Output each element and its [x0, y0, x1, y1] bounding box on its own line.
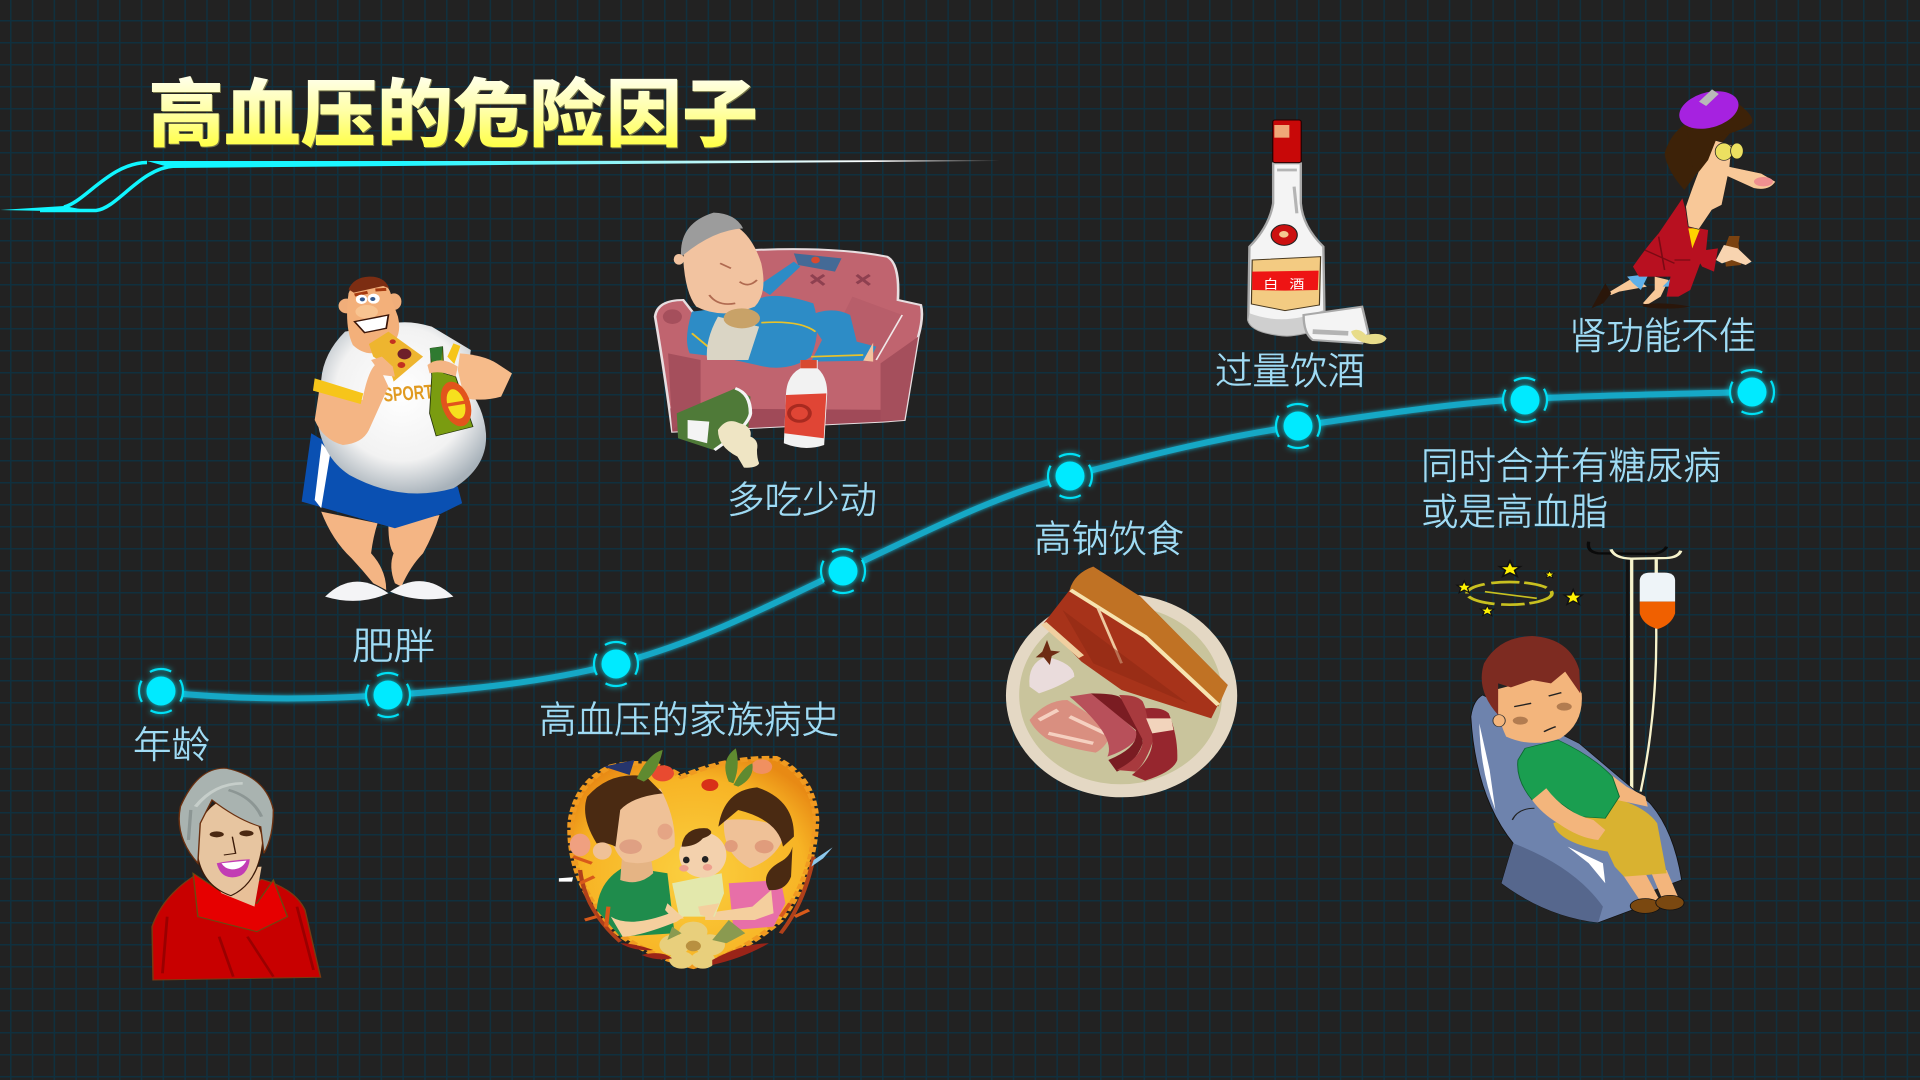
label: 年龄: 年龄	[133, 724, 210, 766]
icon: elderly woman	[152, 768, 321, 980]
icon: plate of cured meat	[1006, 567, 1237, 797]
shirt and belly	[317, 322, 486, 493]
family figures	[585, 775, 794, 937]
tipped cup	[1304, 307, 1387, 344]
timeline curve	[162, 392, 1752, 698]
meat slices	[1030, 693, 1177, 781]
icon: baijiu bottle with cup	[1248, 120, 1387, 344]
shorts	[302, 433, 462, 528]
sofa	[655, 249, 922, 432]
legs and shoes	[1607, 277, 1669, 305]
label: 高钠饮食: 高钠饮食	[1034, 518, 1184, 560]
label: 同时合并有糖尿病或是高血脂	[1421, 445, 1721, 533]
label: 高血压的家族病史: 高血压的家族病史	[539, 699, 839, 741]
man body	[687, 296, 817, 368]
head	[683, 220, 763, 313]
pizza	[369, 332, 423, 382]
label: 肾功能不佳: 肾功能不佳	[1569, 315, 1756, 357]
recliner	[1471, 695, 1682, 923]
title underline swoosh	[0, 160, 1000, 212]
bottle	[427, 347, 476, 436]
label: 同时合并有糖尿病或是高血脂: 或是高血脂	[1421, 491, 1608, 533]
ice bag	[1673, 84, 1745, 136]
bottle label	[1251, 257, 1321, 311]
head	[339, 277, 401, 353]
icon: obese man eating pizza: SPORT	[382, 380, 434, 406]
hand and medicine bottle	[1716, 236, 1752, 267]
title: 高血压的危险因子	[148, 73, 758, 156]
icon: man lying on sofa	[655, 213, 922, 468]
shirt and arms	[1518, 740, 1648, 840]
popcorn bag	[707, 317, 759, 360]
hair	[1665, 103, 1752, 190]
hair fringe	[1686, 123, 1732, 172]
label: 多吃少动: 多吃少动	[727, 479, 877, 521]
head	[1482, 636, 1582, 743]
icon: obese man eating pizza	[302, 277, 512, 601]
arms	[315, 363, 388, 445]
legs	[321, 512, 386, 590]
bottle label: 白	[1263, 276, 1278, 291]
bottle label: 酒	[1289, 276, 1304, 291]
icon: dizzy boy on IV drip in chair	[1457, 542, 1684, 923]
pants and legs	[1553, 798, 1684, 913]
garlic and star anise	[1029, 640, 1074, 693]
icon: sick man with ice bag	[1591, 84, 1776, 309]
face	[1686, 140, 1776, 229]
label: 同时合并有糖尿病或是高血脂: 同时合并有糖尿病	[1421, 445, 1721, 487]
label: 过量饮酒: 过量饮酒	[1215, 350, 1365, 392]
label: 肥胖: 肥胖	[352, 625, 435, 667]
title: 高血压的危险因子	[149, 74, 759, 157]
white bottle	[784, 360, 827, 448]
IV stand	[1588, 542, 1681, 792]
robe	[1633, 198, 1718, 297]
meat slab	[1044, 567, 1228, 718]
bucket and popcorn	[677, 388, 750, 450]
timeline nodes	[139, 370, 1774, 717]
slippers	[325, 582, 388, 601]
icon: family in heart	[559, 748, 833, 969]
dizzy ring and stars	[1457, 561, 1582, 616]
flowers and wreath	[559, 748, 833, 969]
